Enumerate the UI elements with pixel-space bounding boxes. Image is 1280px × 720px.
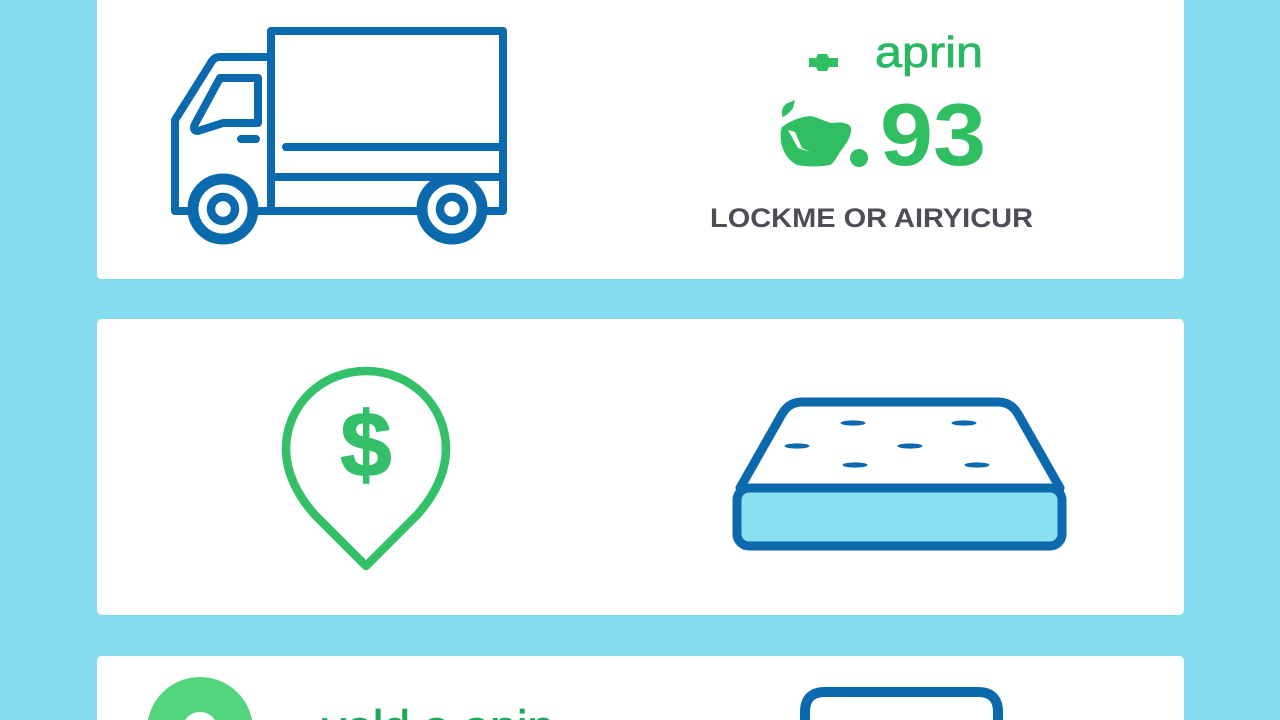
icon: mattress xyxy=(737,402,1062,546)
icon: green minus mark xyxy=(809,54,838,71)
panel: delivery truck and price xyxy=(97,0,1184,279)
panel: bottom partial row xyxy=(97,656,1184,720)
icon: dollar location pin xyxy=(286,371,446,566)
heading: aprin: aprin xyxy=(875,28,983,77)
caption: LOCKME OR AIRYICUR xyxy=(710,203,1033,233)
icon: blue rounded box xyxy=(805,692,998,720)
panel: price pin and mattress xyxy=(97,319,1184,615)
icon: dollar location pin: $ xyxy=(340,394,392,496)
icon: green ring xyxy=(148,677,252,720)
icon: green blob glyph xyxy=(781,100,851,166)
icon: delivery truck xyxy=(175,31,503,239)
figure: .93: 93 xyxy=(880,85,986,184)
